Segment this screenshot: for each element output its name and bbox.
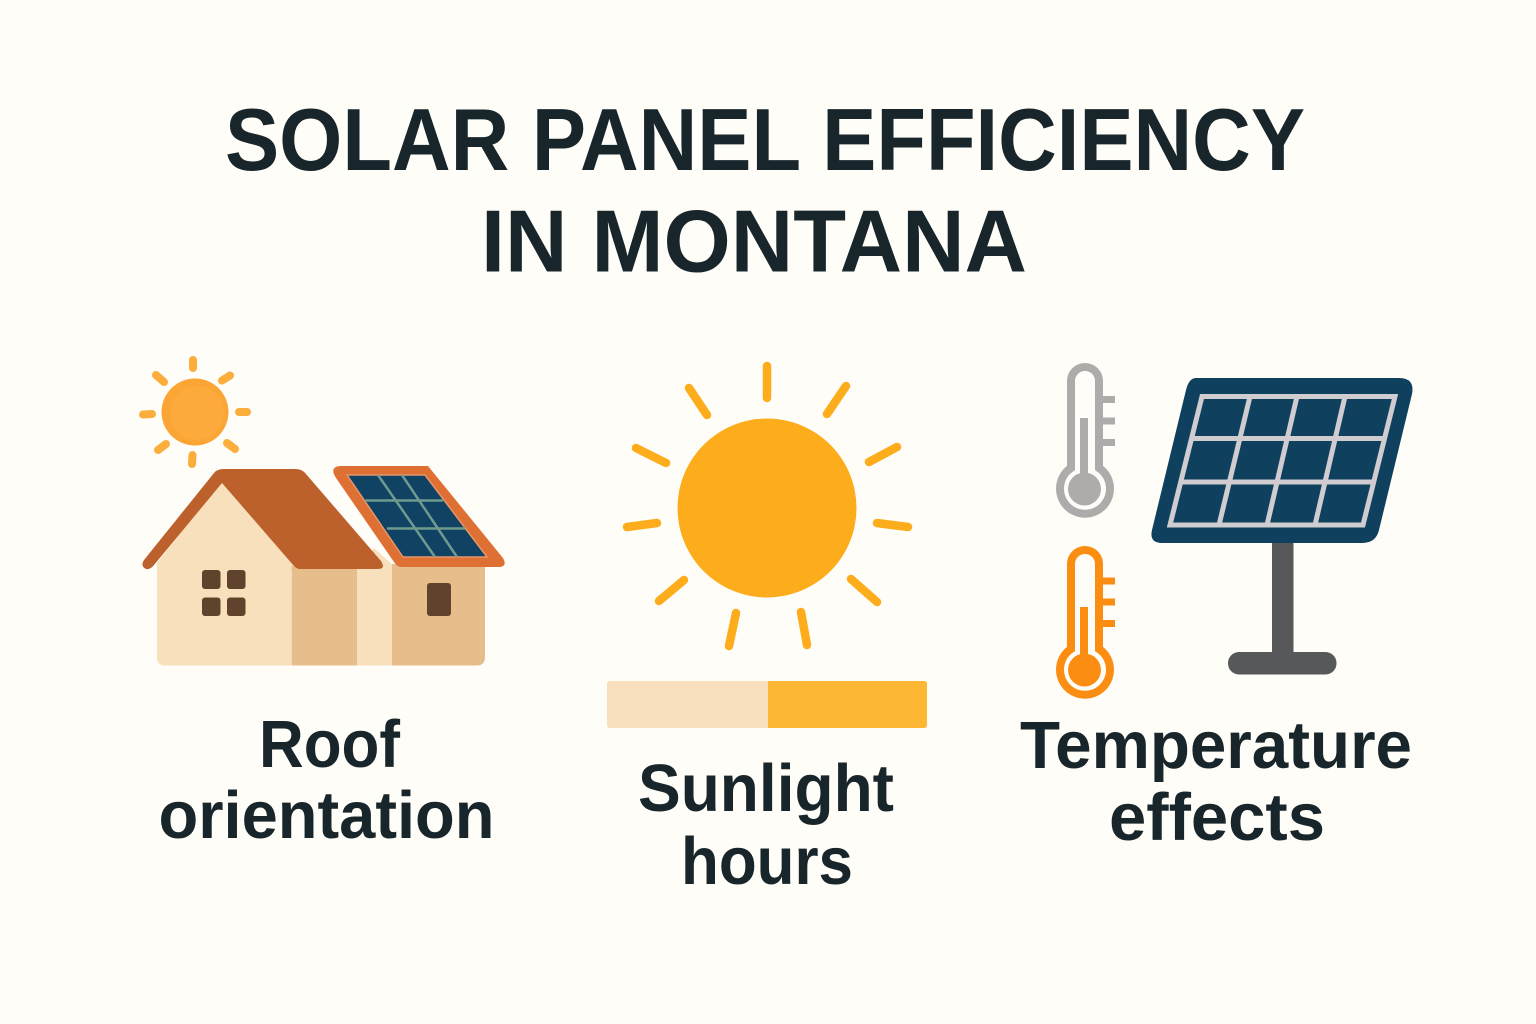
label: roof orientation: Roof [259,707,401,782]
house walls [157,480,485,666]
label: sunlight hours: Sunlight [638,751,894,826]
progress bar [607,681,927,728]
icon: house windows [202,570,451,616]
label: roof orientation: orientation [158,778,494,853]
label: temperature effects: effects [1109,780,1325,855]
title: IN MONTANA [481,192,1027,290]
icon: small sun [143,360,247,464]
icon: cool thermometer [1060,367,1115,514]
main roof [142,469,383,569]
label: temperature effects [1020,708,1412,855]
icon: roof solar panel [333,466,505,567]
label: roof orientation [158,707,494,853]
label: sunlight hours: hours [681,824,853,899]
label: sunlight hours [638,751,894,899]
panel: temperature effects [1020,367,1412,855]
title [225,90,1305,290]
label: temperature effects: Temperature [1020,708,1412,783]
panel: sunlight hours [607,366,927,899]
panel: roof orientation [142,360,505,853]
icon: hot thermometer [1060,550,1115,695]
icon: house with solar roof [142,466,505,666]
icon: solar panel on stand [1151,378,1412,674]
icon: large sun [627,366,908,646]
title: SOLAR PANEL EFFICIENCY [225,90,1305,189]
